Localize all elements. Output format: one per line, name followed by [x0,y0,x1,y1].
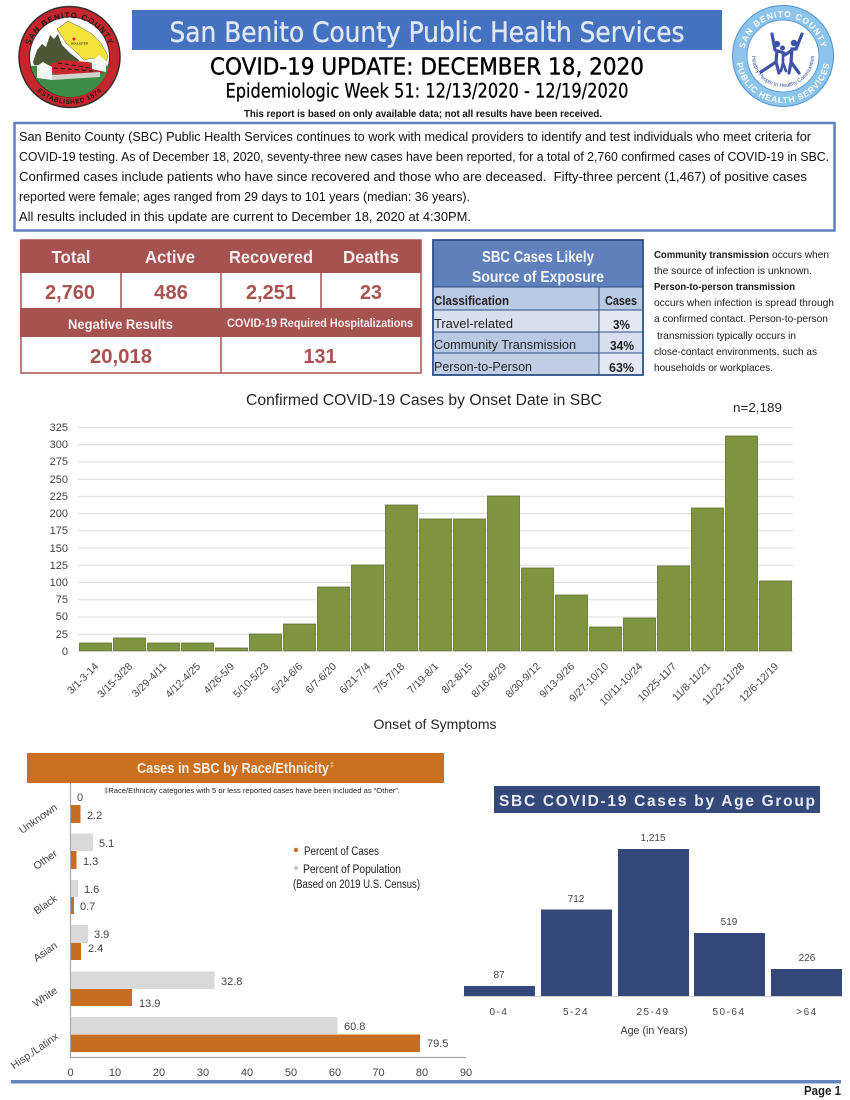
x axis date labels: 12/6-12/19 [737,661,781,705]
race value labels: 32.8 [221,976,242,988]
hospitalization and negative headers: Negative Results [68,317,173,332]
exposure table rows: 34% [610,338,634,353]
age bars [464,849,842,996]
race chart legend: Percent of Population [303,864,401,876]
x axis ticks: 90 [460,1067,472,1079]
age value labels: 519 [721,917,738,928]
stat values: 20,018 [90,346,152,368]
x axis date labels: 7/19-8/1 [405,661,441,696]
age axis title: Age (in Years) [620,1025,688,1037]
icon: San Benito County seal: HOLLISTER [71,42,89,46]
age chart header [494,786,820,813]
x axis date labels: 6/7-6/20 [303,661,339,696]
race category labels: White [31,985,60,1010]
panel: summary text: San Benito County (SBC) Public Health Services continues to work with medical providers to identify and test individuals who meet criteria for [19,130,811,144]
exposure table rows: Classification [434,293,509,308]
exposure table rows: Cases [605,293,637,308]
stat values: 131 [304,346,336,368]
age value labels: 1,215 [640,833,666,844]
race category labels: Hisp./Latinx [9,1030,61,1072]
population bars [71,834,338,1034]
stat headers: Deaths [343,247,399,267]
race value labels: 2.4 [88,943,103,955]
age value labels [493,833,816,981]
text block: transmission definitions: transmission typically occurs in [657,330,796,342]
y axis labels: 325 [50,422,68,434]
hospitalization and negative headers: COVID-19 Required Hospitalizations [227,318,413,330]
x axis date labels: 5/24-6/6 [269,661,305,696]
exposure table title: SBC Cases Likely [482,249,594,266]
age category labels: 0-4 [490,1007,508,1018]
y axis labels [50,422,68,658]
stat values: 2,251 [246,282,296,304]
stat values: 23 [360,282,382,304]
y axis labels: 0 [62,646,68,658]
stat values [45,282,382,368]
race chart legend [293,846,420,891]
age category labels: 5-24 [563,1007,589,1018]
age category labels: 50-64 [712,1007,746,1018]
age value labels: 87 [493,970,505,981]
race category labels: Unknown [17,802,60,837]
y axis labels: 25 [56,629,68,641]
x axis ticks: 0 [67,1067,74,1079]
race value labels: 2.2 [87,810,102,822]
icon: Public Health Services logo: PUBLIC HEALTH SERVICES [736,62,829,103]
stat headers: Active [145,247,195,267]
y axis labels: 175 [50,525,68,537]
x axis ticks [67,1067,472,1079]
race value labels: 60.8 [344,1021,365,1033]
race category labels: Black [32,892,60,917]
x axis date labels [65,661,781,708]
panel: likely source of exposure table [433,240,643,375]
race category labels: Other [31,847,60,873]
y axis labels: 300 [50,439,68,451]
icon: San Benito County seal [18,6,121,108]
x axis date labels: 11/8-11/21 [670,661,713,704]
text block: transmission definitions: a confirmed contact. Person-to-person [654,313,828,325]
y axis labels: 75 [56,594,68,606]
text block: transmission definitions: occurs when infection is spread through [654,297,834,309]
icon: Public Health Services logo [732,5,834,107]
race chart legend: Percent of Cases [304,846,379,858]
subheading: epidemiologic week: Epidemiologic Week 51: 12/13/2020 - 12/19/2020 [226,80,628,102]
exposure table title: Source of Exposure [472,269,604,286]
sample size note: n=2,189 [733,401,782,415]
x axis ticks: 40 [241,1067,253,1079]
hospitalization and negative headers [68,317,413,332]
x axis date labels: 8/30-9/12 [503,661,543,700]
x axis ticks: 50 [285,1067,297,1079]
text block: transmission definitions: Person-to-person transmission [654,281,795,293]
exposure table rows: 3% [613,317,630,332]
x axis ticks: 70 [372,1067,385,1079]
case bars [71,805,420,1052]
chart: cases by race and ethnicity [9,753,472,1079]
icon: Public Health Services logo: SAN BENITO COUNTY [739,11,827,48]
age category labels: 25-49 [636,1007,670,1018]
age category labels: >64 [796,1007,818,1018]
x axis date labels: 5/10-5/23 [231,661,271,700]
x axis date labels: 3/15-3/28 [95,661,135,700]
age chart header: SBC COVID-19 Cases by Age Group [499,793,815,810]
x axis date labels: 10/11-10/24 [598,661,645,708]
y axis labels: 125 [50,560,68,572]
x axis date labels: 8/16-8/29 [469,661,509,700]
panel: case totals table [20,240,421,373]
age category labels [490,1007,818,1018]
panel: summary text: All results included in this update are current to December 18, 2020 at 4:30PM. [19,210,471,224]
x axis ticks: 20 [153,1067,165,1079]
x axis ticks: 30 [197,1067,209,1079]
text block: transmission definitions: Community transmission [654,249,769,261]
x axis ticks: 80 [416,1067,428,1079]
exposure table title [472,249,604,286]
race chart header [27,753,444,783]
race value labels: 0.7 [80,901,95,913]
race category labels: Asian [31,940,60,965]
text block: transmission definitions [654,249,834,374]
page number: Page 1 [804,1084,841,1098]
panel: summary text: COVID-19 testing. As of December 18, 2020, seventy-three new cases have been reported, for a total of 2,760 confirmed cases of COVID-19 in SBC. [19,150,829,164]
x axis title: Onset of Symptoms [374,716,496,732]
x axis ticks: 10 [109,1067,121,1079]
panel: summary text: reported were female; ages ranged from 29 days to 101 years (median: 36 years). [19,190,470,204]
stat headers: Total [52,247,90,267]
exposure table rows: 63% [609,360,634,375]
race chart legend: (Based on 2019 U.S. Census) [293,879,420,891]
race value labels [77,792,448,1050]
race value labels: 5.1 [99,838,114,850]
race category labels [9,802,61,1072]
heading: COVID-19 update date: COVID-19 UPDATE: DECEMBER 18, 2020 [210,52,644,80]
x axis date labels: 10/25-11/7 [636,661,679,704]
x axis date labels: 4/12-4/25 [163,661,203,700]
race value labels: 79.5 [427,1038,448,1050]
panel: summary text: Confirmed cases include patients who have since recovered and those who are deceased. Fifty-three percent (1,467) of positive cases [19,170,807,184]
text block: transmission definitions: occurs when [772,249,829,261]
x axis date labels: 6/21-7/4 [337,661,373,696]
y axis labels: 225 [50,491,68,503]
y axis labels: 275 [50,456,68,468]
x axis ticks: 60 [329,1067,341,1079]
icon: Public Health Services logo: Healthy People In Healthy Communities [752,56,814,87]
panel: summary text [14,123,834,230]
race chart footnote: ‡Race/Ethnicity categories with 5 or less reported cases have been included as “Other”. [104,786,400,795]
stat values: 486 [154,282,188,304]
stat headers [52,247,399,267]
race value labels: 3.9 [94,929,109,941]
icon: San Benito County seal: SAN BENITO COUNTY [26,12,114,45]
exposure table rows: Travel-related [434,316,513,331]
race value labels: 1.6 [84,884,99,896]
icon: San Benito County seal: ESTABLISHED 1874 [38,88,101,104]
race value labels: 0 [77,792,83,804]
exposure table rows: Person-to-Person [434,359,532,374]
text block: transmission definitions: households or workplaces. [654,362,773,374]
x axis date labels: 9/27-10/10 [567,661,611,705]
x axis date labels: 11/22-11/28 [700,661,747,708]
text block: transmission definitions: close-contact environments, such as [654,346,817,358]
exposure table rows [434,293,637,375]
y axis labels: 100 [50,577,68,589]
x axis date labels: 3/29-4/11 [130,661,169,700]
y axis labels: 200 [50,508,68,520]
y axis labels: 250 [50,474,68,486]
stat values: 2,760 [45,282,95,304]
x axis date labels: 7/5-7/18 [371,661,407,696]
race value labels: 13.9 [139,998,160,1010]
age value labels: 226 [799,953,816,964]
footer rule [11,1080,841,1084]
chart title: Confirmed COVID-19 Cases by Onset Date in SBC [246,392,602,409]
x axis date labels: 9/13-9/26 [537,661,577,700]
exposure table rows: Community Transmission [434,337,576,352]
y axis labels: 50 [56,611,68,623]
x axis date labels: 3/1-3-14 [65,661,101,697]
race chart header: Cases in SBC by Race/Ethnicity [137,761,329,777]
text block: transmission definitions: the source of infection is unknown. [654,265,812,277]
x axis date labels: 4/26-5/9 [201,661,237,696]
x axis date labels: 8/2-8/15 [439,661,475,696]
bars [80,436,792,651]
chart: cases by age group [463,786,842,1037]
race value labels: 1.3 [83,856,98,868]
race chart header: ‡ [330,762,334,769]
age value labels: 712 [568,894,585,905]
y axis labels: 150 [50,543,68,555]
report note: This report is based on only available data; not all results have been received. [244,109,602,120]
stat headers: Recovered [229,247,313,267]
chart: confirmed cases by onset date [50,392,793,732]
title banner: San Benito County Public Health Services [170,16,684,48]
